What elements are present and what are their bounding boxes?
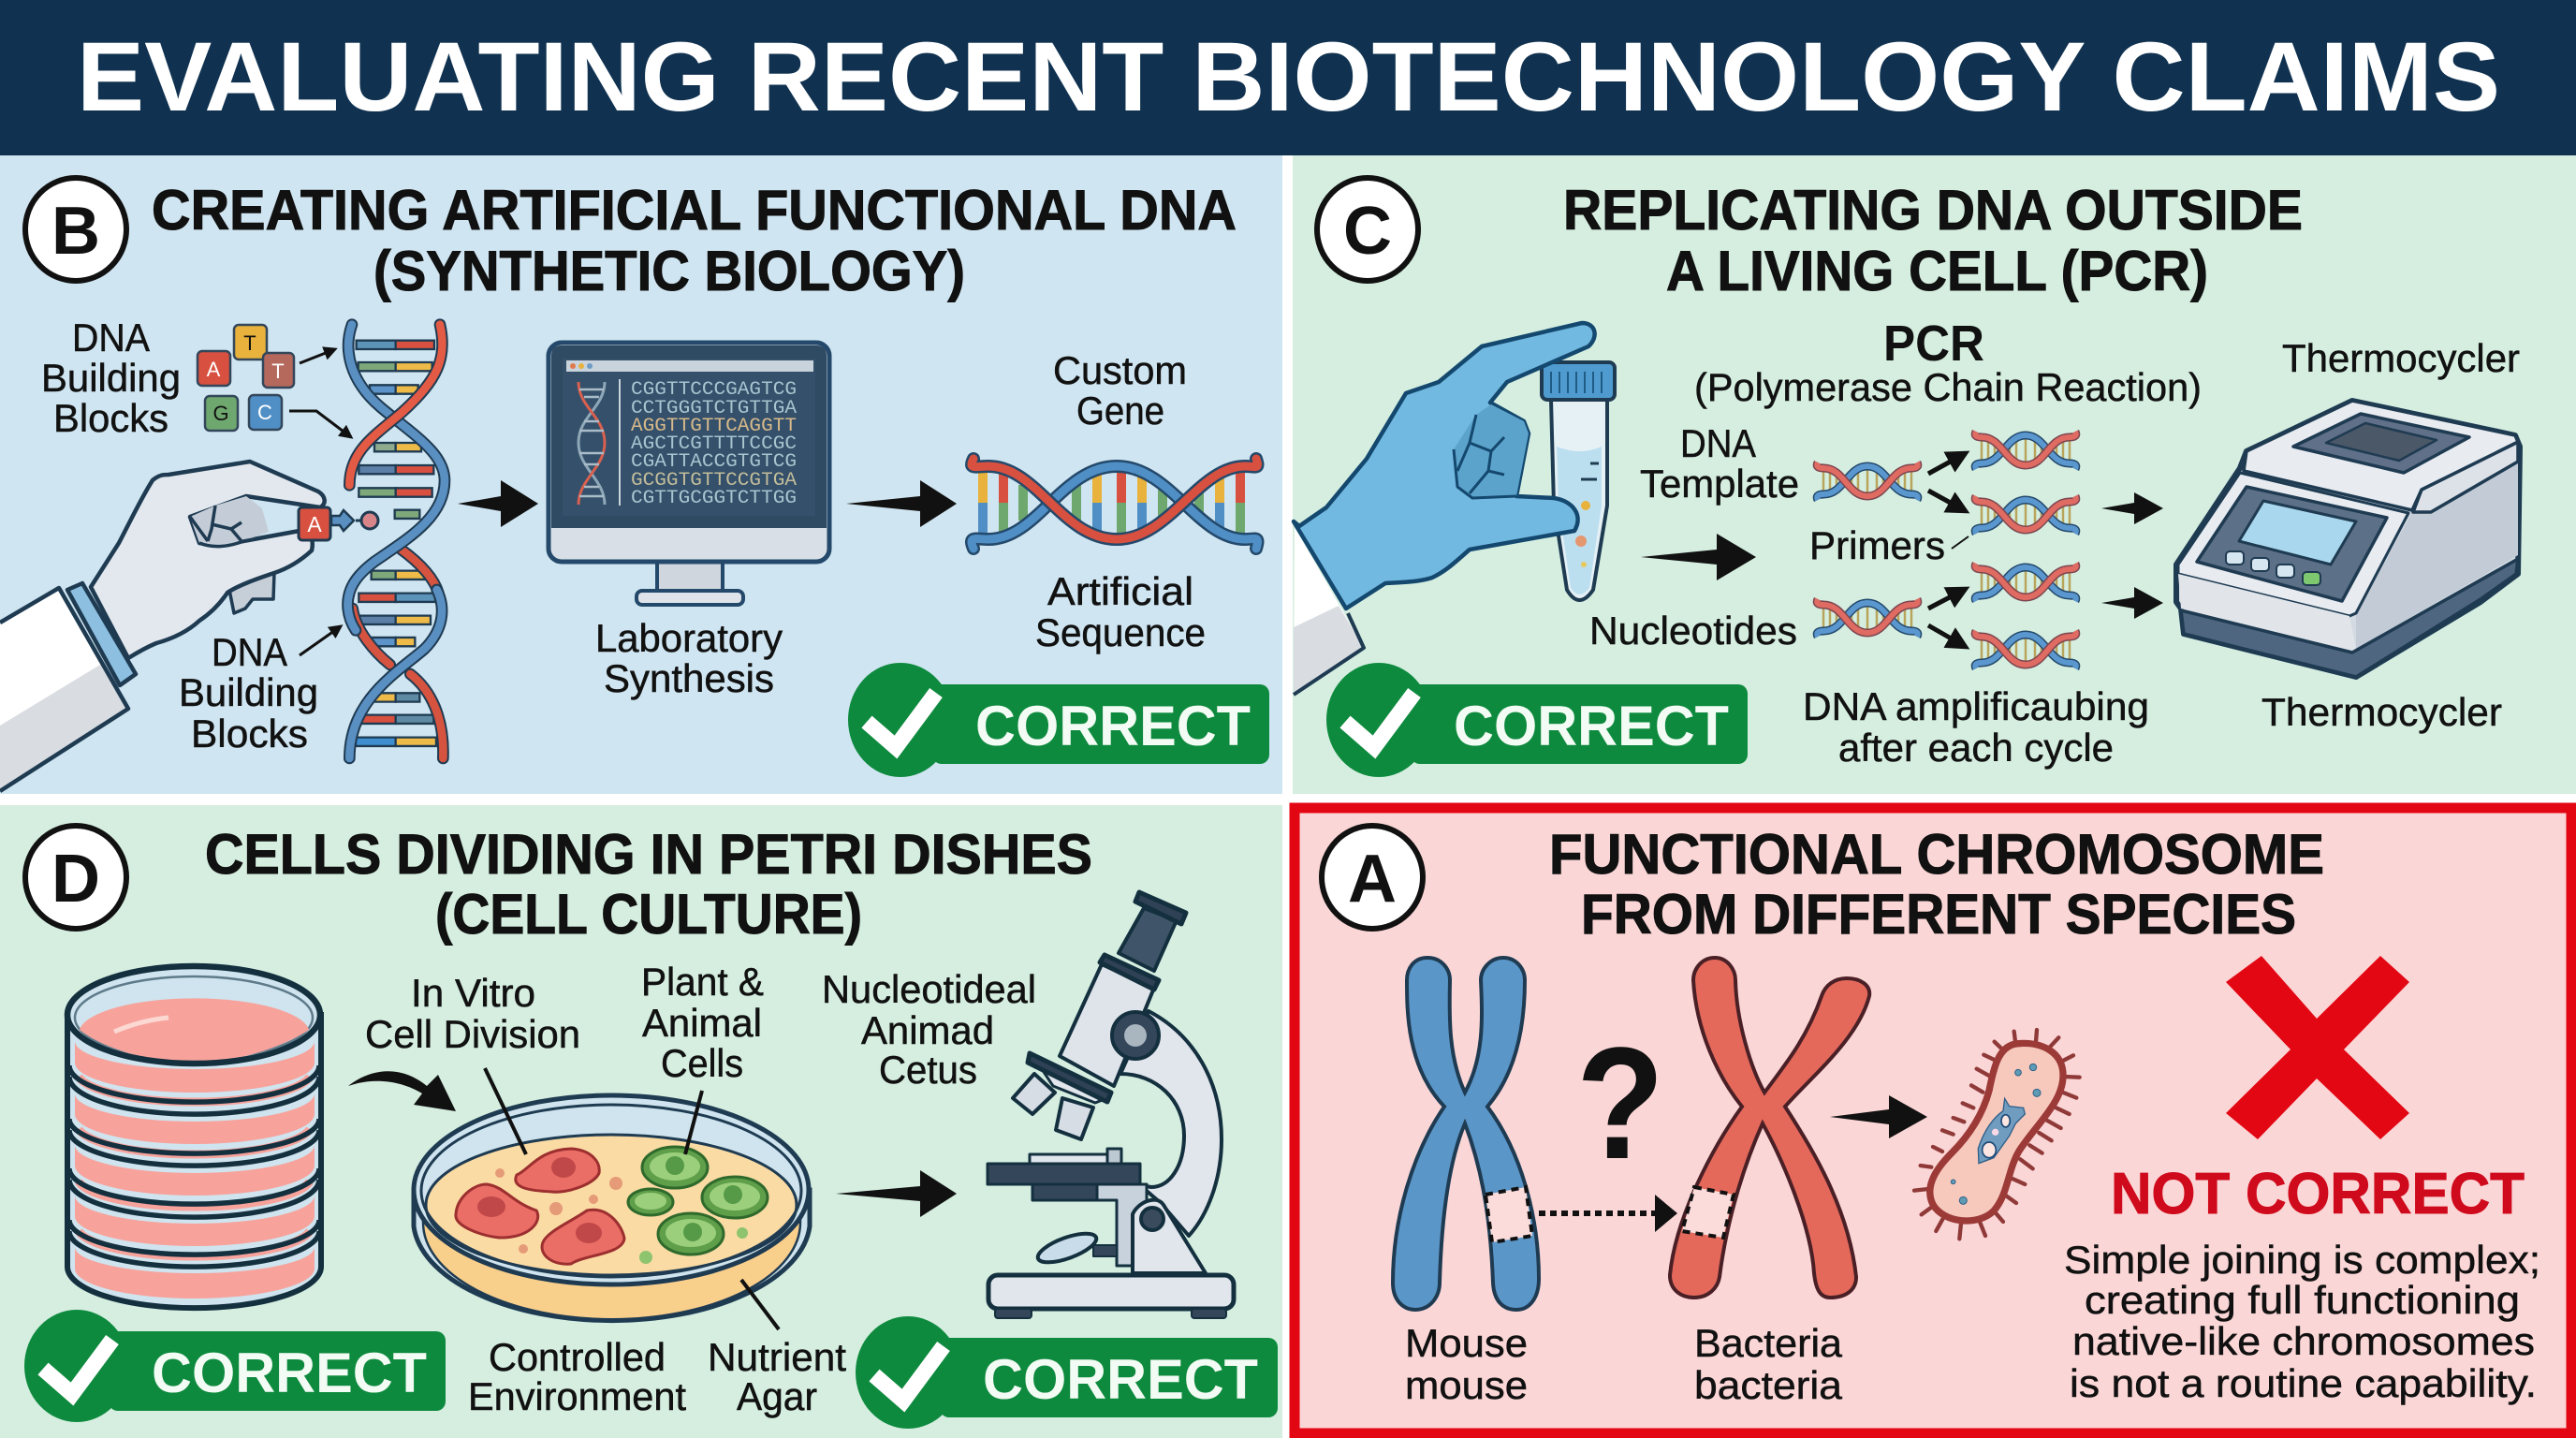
icon: large petri dish with cells — [414, 1095, 810, 1321]
label: artificial sequence: Sequence — [1035, 610, 1206, 654]
badge letter D: D — [51, 842, 100, 917]
label: custom gene: Custom — [1053, 348, 1187, 392]
label: nucleotideal animad cetus: Nucleotideal — [822, 967, 1036, 1011]
label: mouse — [1405, 1321, 1528, 1407]
label: DNA amplification — [1803, 684, 2149, 770]
arrows: DNA to thermocycler — [2101, 492, 2163, 619]
label: DNA building blocks top — [41, 315, 181, 440]
sequence text: CCTGGGTCTGTTGA — [631, 398, 797, 419]
label: PCR: (Polymerase Chain Reaction) — [1694, 365, 2202, 409]
sequence text: AGCTCGTTTTCCGC — [631, 433, 797, 455]
label: in vitro cell division — [365, 971, 580, 1056]
label: PCR — [1694, 315, 2202, 409]
label: controlled environment: Environment — [468, 1374, 686, 1418]
heading B: (SYNTHETIC BIOLOGY) — [373, 240, 965, 302]
label: in vitro cell division: In Vitro — [411, 971, 535, 1015]
icon: computer monitor with sequence — [549, 343, 829, 605]
label: DNA building blocks top: DNA — [72, 315, 150, 360]
label: laboratory synthesis: Laboratory — [595, 616, 783, 660]
label: bacteria: Bacteria — [1694, 1321, 1843, 1365]
explanation text: creating full functioning — [2085, 1278, 2520, 1322]
icon: nucleotide blocks — [198, 325, 294, 431]
heading C: REPLICATING DNA OUTSIDE — [1563, 179, 2303, 242]
label: controlled environment: Controlled — [489, 1335, 666, 1379]
explanation text: native-like chromosomes — [2072, 1319, 2535, 1363]
arrows from blocks to helix — [289, 349, 351, 655]
heading A: FUNCTIONAL CHROMOSOME — [1549, 823, 2324, 886]
test tube — [1542, 362, 1615, 600]
badge letter B: B — [51, 194, 100, 269]
panel: A chromosome, not correct — [1295, 808, 2571, 1433]
label: in vitro cell division: Cell Division — [365, 1012, 580, 1056]
icon: small DNA strands — [1817, 432, 2076, 668]
label: thermocycler bottom: Thermocycler — [2261, 690, 2502, 734]
question mark: ? — [1576, 1015, 1664, 1193]
icon: stack of petri dishes — [67, 966, 321, 1308]
label: plant and animal cells: Plant & — [641, 960, 764, 1004]
heading A: FROM DIFFERENT SPECIES — [1581, 883, 2296, 946]
badge letter C — [1317, 178, 1418, 281]
icon: red bacteria chromosome — [1670, 958, 1869, 1298]
heading C — [1563, 179, 2303, 302]
label: laboratory synthesis — [595, 616, 783, 700]
icon: nucleotide blocks: C — [257, 401, 272, 424]
header banner — [0, 0, 2576, 155]
label: laboratory synthesis: Synthesis — [604, 656, 774, 700]
label: DNA template — [1640, 421, 1799, 506]
heading D — [205, 823, 1092, 946]
label: DNA building blocks top: Building — [41, 356, 181, 400]
heading D: (CELL CULTURE) — [435, 883, 862, 946]
label: bacteria — [1694, 1321, 1843, 1407]
explanation text: Simple joining is complex; — [2064, 1238, 2540, 1282]
sequence text: CGATTACCGTGTCG — [631, 451, 797, 473]
label: thermocycler top: Thermocycler — [2282, 336, 2520, 380]
sequence text: AGGTTGTTCAGGTT — [631, 416, 797, 437]
label: plant and animal cells: Animal — [642, 1001, 762, 1045]
icon: nucleotide blocks: T — [271, 360, 285, 383]
title: EVALUATING RECENT BIOTECHNOLOGY CLAIMS — [77, 22, 2500, 132]
panel: D cell culture — [0, 805, 1282, 1438]
label: primers: Primers — [1809, 523, 1945, 567]
label: nutrient agar: Agar — [737, 1374, 817, 1418]
label: DNA building blocks top: Blocks — [53, 396, 168, 440]
icon: bacterium — [1914, 1030, 2080, 1239]
badge letter A — [1322, 826, 1423, 929]
verdict badge: correct left — [24, 1310, 446, 1422]
icon: nucleotide A being inserted — [299, 507, 378, 540]
verdict: not correct: NOT CORRECT — [2111, 1162, 2525, 1226]
panel: B synthetic biology — [0, 155, 1282, 794]
arrow: chromosome to bacterium — [1830, 1095, 1927, 1138]
arrow: curved dish to culture — [348, 1071, 456, 1111]
label: controlled environment — [468, 1335, 686, 1418]
red animal cells — [456, 1149, 624, 1264]
arrows: DNA doubling — [1928, 453, 1969, 647]
label: DNA template: Template — [1640, 462, 1799, 506]
explanation text: is not a routine capability. — [2070, 1361, 2537, 1405]
label: nucleotideal animad cetus: Cetus — [879, 1048, 977, 1092]
verdict badge: correct — [1326, 663, 1748, 777]
arrow: dotted transfer — [1539, 1195, 1677, 1232]
explanation text — [2064, 1238, 2540, 1405]
badge letter C: C — [1343, 194, 1392, 269]
icon: nucleotide blocks: T — [243, 331, 256, 355]
icon: nucleotide A being inserted: A — [307, 512, 322, 536]
heading C: A LIVING CELL (PCR) — [1666, 240, 2208, 302]
label: DNA building blocks bottom: Building — [179, 670, 318, 714]
icon: nucleotide blocks: A — [207, 358, 221, 381]
label: DNA amplification: DNA amplificaubing — [1803, 684, 2149, 728]
verdict badge: correct: CORRECT — [1454, 695, 1729, 757]
label: DNA building blocks bottom: Blocks — [191, 712, 308, 756]
arrow: tube to PCR — [1641, 534, 1756, 580]
verdict badge: correct right: CORRECT — [983, 1348, 1258, 1411]
heading B: CREATING ARTIFICIAL FUNCTIONAL DNA — [152, 179, 1237, 242]
icon: blue mouse chromosome — [1393, 958, 1539, 1310]
icon: red X — [2226, 956, 2409, 1139]
verdict badge: correct: CORRECT — [975, 695, 1251, 757]
icon: horizontal artificial DNA — [972, 459, 1258, 549]
label: plant and animal cells: Cells — [661, 1041, 743, 1085]
label: nutrient agar — [708, 1335, 846, 1418]
sequence text: GCGGTGTTCCGTGA — [631, 470, 797, 492]
verdict badge: correct left: CORRECT — [152, 1342, 427, 1404]
label: artificial sequence — [1035, 569, 1206, 654]
label: DNA template: DNA — [1680, 421, 1756, 465]
leader lines — [485, 1068, 779, 1329]
label: custom gene — [1053, 348, 1187, 433]
icon: sleeve, blue glove and test tube — [1294, 323, 1615, 695]
icon: nucleotide blocks: G — [212, 402, 229, 425]
heading B — [152, 179, 1237, 302]
label: PCR: PCR — [1883, 315, 1984, 372]
label: DNA building blocks bottom — [179, 630, 318, 756]
label: nutrient agar: Nutrient — [708, 1335, 846, 1379]
label: mouse: Mouse — [1405, 1321, 1528, 1365]
sequence text: CGTTGCGGTCTTGG — [631, 488, 797, 509]
label: nucleotideal animad cetus: Animad — [861, 1008, 994, 1052]
sequence text — [631, 379, 797, 509]
arrow: helix to computer — [458, 480, 538, 527]
label: nucleotides: Nucleotides — [1589, 609, 1797, 653]
label: artificial sequence: Artificial — [1047, 569, 1193, 613]
label: mouse: mouse — [1405, 1363, 1528, 1407]
label: bacteria: bacteria — [1694, 1363, 1843, 1407]
label: DNA amplification: after each cycle — [1838, 726, 2114, 770]
sequence text: CGGTTCCCGAGTCG — [631, 379, 797, 401]
icon: microscope — [988, 892, 1234, 1318]
label: nucleotideal animad cetus — [822, 967, 1036, 1092]
heading D: CELLS DIVIDING IN PETRI DISHES — [205, 823, 1092, 886]
label: DNA building blocks bottom: DNA — [212, 630, 287, 674]
badge letter D — [25, 826, 126, 929]
heading A — [1549, 823, 2324, 946]
vertical DNA double helix — [347, 325, 445, 758]
icon: gloved hand with lab coat sleeve — [0, 462, 325, 791]
icon: thermocycler machine — [2176, 401, 2520, 677]
arrow: computer to gene — [846, 480, 957, 527]
label: plant and animal cells — [641, 960, 764, 1085]
badge letter A: A — [1348, 842, 1397, 917]
panel: C PCR — [1293, 155, 2576, 794]
label: custom gene: Gene — [1076, 389, 1164, 433]
verdict badge: correct — [848, 663, 1269, 777]
green plant cells — [628, 1147, 768, 1255]
arrow: dish to microscope — [836, 1170, 957, 1217]
badge letter B — [25, 178, 126, 281]
verdict badge: correct right — [856, 1316, 1278, 1429]
